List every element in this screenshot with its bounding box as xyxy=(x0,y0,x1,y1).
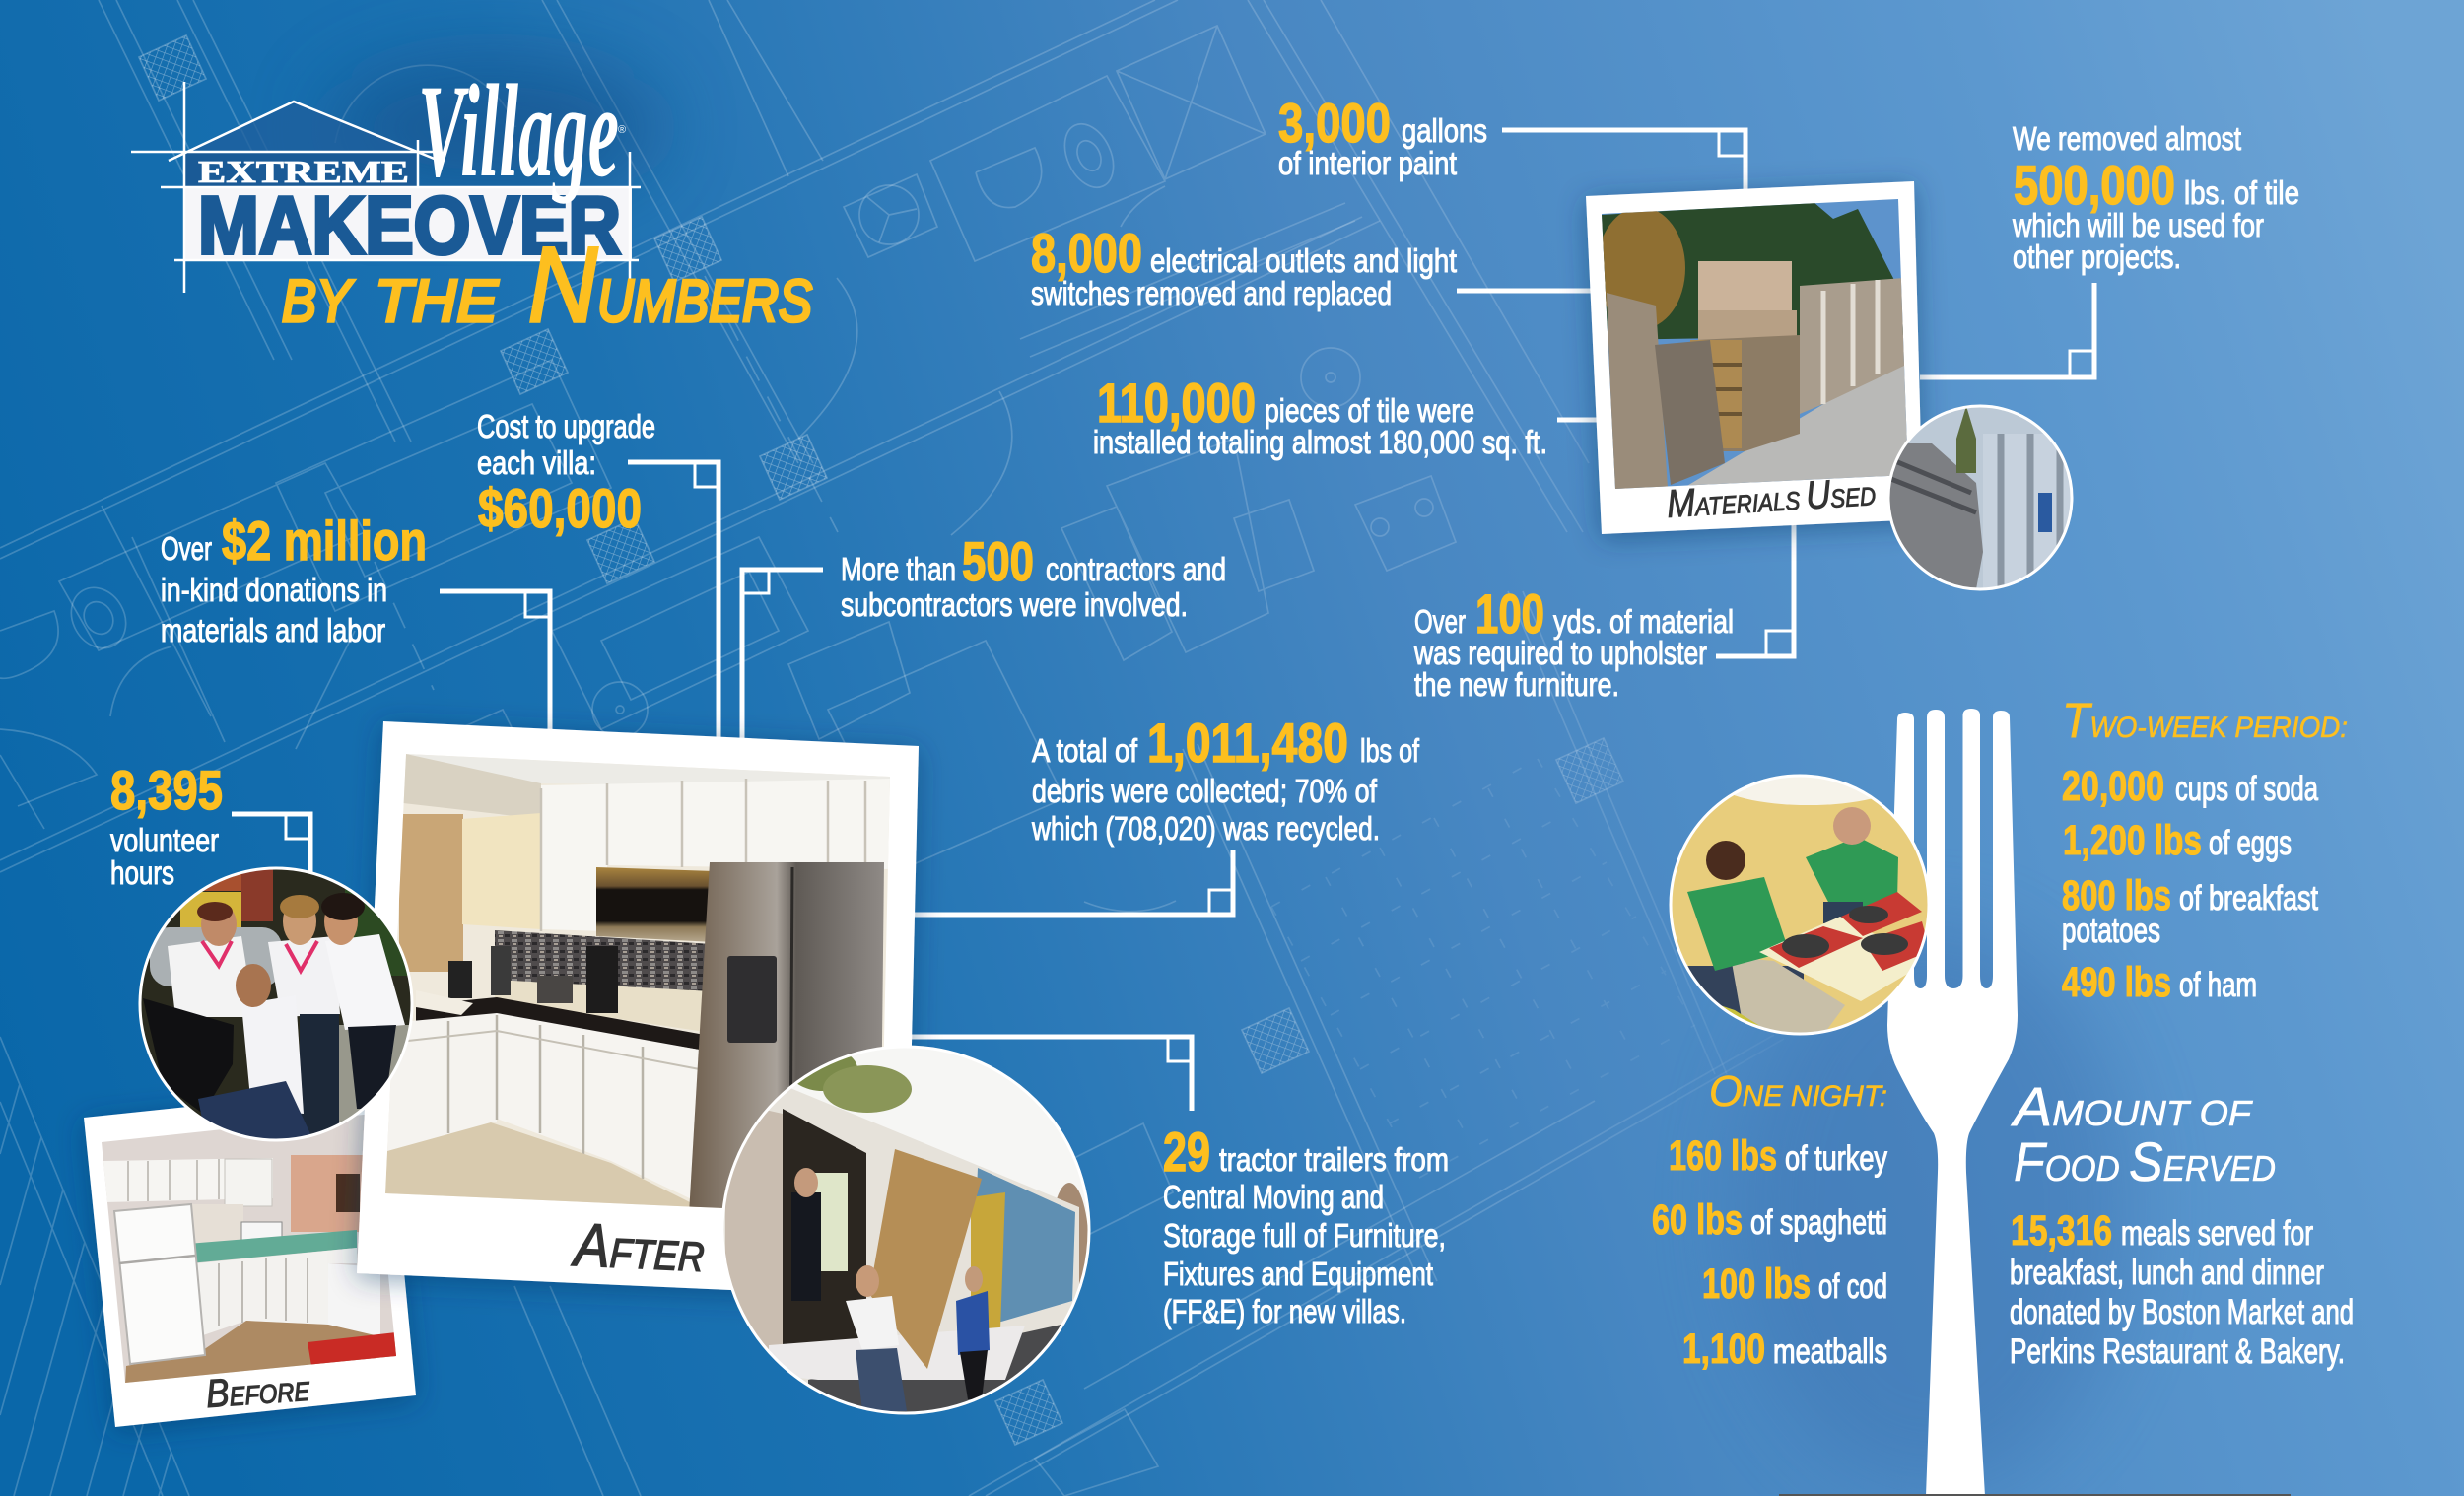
photo circle: volunteers xyxy=(138,867,414,1143)
text: tractor trailers: (FF&E) for new villas. xyxy=(1163,1293,1406,1329)
photo circle: paint buckets xyxy=(1888,406,2072,589)
text: paint xyxy=(1278,92,1487,181)
list: two-week food amounts: of ham xyxy=(2179,966,2257,1004)
text: cost to upgrade xyxy=(477,408,655,539)
icon: fork xyxy=(1887,709,2018,1496)
title: By the Numbers: UMBERS xyxy=(597,268,812,334)
logo: Extreme Makeover Village: MAKEOVER xyxy=(198,179,621,271)
photo circle: moving truck xyxy=(722,1047,1089,1413)
text: meals served: breakfast, lunch and dinner xyxy=(2010,1254,2324,1292)
polaroid: after photo xyxy=(357,721,919,1298)
text: cost to upgrade: Cost to upgrade xyxy=(477,408,655,444)
text: tractor trailers: Central Moving and xyxy=(1163,1179,1384,1215)
text: contractors: 500 xyxy=(962,530,1034,592)
text: tractor trailers: Storage full of Furniture, xyxy=(1163,1217,1446,1254)
title: By the Numbers xyxy=(282,225,812,344)
text: upholstery: 100 xyxy=(1475,582,1544,645)
list: two-week food amounts: of breakfast xyxy=(2179,879,2318,918)
text: upholstery: Over xyxy=(1414,603,1466,640)
text: debris: which (708,020) was recycled. xyxy=(1031,810,1380,847)
text: debris: 1,011,480 xyxy=(1147,712,1348,774)
list: one-night food amounts: of spaghetti xyxy=(1750,1203,1887,1242)
text: contractors xyxy=(841,530,1226,623)
text: volunteer hours: hours xyxy=(110,854,174,891)
text: meals served xyxy=(2010,1207,2354,1371)
text: paint: gallons xyxy=(1402,112,1487,149)
list: one-night food amounts: of cod xyxy=(1818,1267,1887,1306)
connector: debris xyxy=(911,850,1233,915)
text: tile pieces: pieces of tile were xyxy=(1265,392,1474,429)
heading: amount of food served xyxy=(2011,1075,2276,1192)
text: upholstery: was required to upholster xyxy=(1413,635,1707,671)
text: two million donations: in-kind donations in xyxy=(161,572,387,608)
polaroid: before photo: BEFORE xyxy=(205,1366,311,1416)
text: upholstery: the new furniture. xyxy=(1414,666,1619,703)
text: electrical outlets: 8,000 xyxy=(1031,222,1142,284)
text: tile pieces: installed totaling almost 180,000 sq. ft. xyxy=(1093,424,1547,460)
text: debris: A total of xyxy=(1032,732,1138,769)
connector: upholstery xyxy=(1716,522,1794,656)
heading: two-week period: TWO-WEEK PERIOD: xyxy=(2062,693,2348,748)
text: tractor trailers: tractor trailers from xyxy=(1219,1141,1449,1178)
text: contractors: subcontractors were involved. xyxy=(841,586,1188,623)
text: two million donations: Over xyxy=(161,530,212,567)
text: meals served: Perkins Restaurant & Bakery. xyxy=(2010,1332,2345,1371)
connector: two million donations xyxy=(440,591,550,739)
connector: tile removed xyxy=(1920,283,2094,377)
text: two million donations xyxy=(161,510,427,648)
heading: amount of food served: AMOUNT OF xyxy=(2011,1075,2253,1137)
connector: paint xyxy=(1502,130,1745,192)
list: two-week food amounts: 490 lbs xyxy=(2062,959,2171,1006)
connector: tile pieces xyxy=(1557,418,1597,422)
list: two-week food amounts: 20,000 xyxy=(2062,763,2164,810)
list: one-night food amounts: 100 lbs xyxy=(1702,1260,1811,1308)
text: volunteer hours: volunteer xyxy=(110,822,219,858)
text: two million donations: materials and labor xyxy=(161,612,385,648)
list: two-week food amounts: of eggs xyxy=(2209,824,2292,862)
title: By the Numbers: N xyxy=(528,225,598,344)
text: upholstery: yds. of material xyxy=(1553,603,1734,640)
polaroid: materials used photo xyxy=(1586,181,1923,534)
text: electrical outlets: switches removed and replaced xyxy=(1031,275,1392,311)
text: tile pieces xyxy=(1093,372,1547,460)
text: debris xyxy=(1031,712,1420,847)
soft dark glow behind fork xyxy=(1735,926,2129,1488)
text: tractor trailers: Fixtures and Equipment xyxy=(1163,1256,1433,1292)
photo circle: volunteers eating xyxy=(1670,762,1930,1035)
text: tile removed xyxy=(2012,120,2299,275)
title: By the Numbers: THE xyxy=(375,268,499,334)
list: one-night food amounts: 1,100 xyxy=(1682,1326,1765,1373)
polaroid: before photo xyxy=(84,1086,416,1427)
logo: Extreme Makeover Village: ® xyxy=(618,124,626,136)
list: two-week food amounts: 1,200 lbs xyxy=(2063,817,2202,864)
text: volunteer hours: 8,395 xyxy=(110,759,223,821)
text: electrical outlets xyxy=(1031,222,1457,311)
list: one-night food amounts: of turkey xyxy=(1785,1139,1887,1178)
list: one-night food amounts: meatballs xyxy=(1773,1332,1887,1371)
list: one-night food amounts: 60 lbs xyxy=(1652,1196,1743,1244)
text: electrical outlets: electrical outlets and light xyxy=(1150,242,1457,279)
bottom edge line xyxy=(1779,1494,2291,1496)
logo: Extreme Makeover Village xyxy=(131,58,660,293)
text: contractors: contractors and xyxy=(1046,551,1226,587)
text: cost to upgrade: each villa: xyxy=(477,444,596,481)
text: tile removed: which will be used for xyxy=(2012,207,2264,243)
list: two-week food amounts: cups of soda xyxy=(2175,770,2318,808)
text: cost to upgrade: $60,000 xyxy=(478,477,642,539)
heading: amount of food served: FOOD SERVED xyxy=(2014,1130,2276,1192)
logo: Extreme Makeover Village: Village xyxy=(418,58,619,205)
connector: volunteer hours xyxy=(232,814,310,877)
text: paint: of interior paint xyxy=(1278,145,1457,181)
text: paint: 3,000 xyxy=(1278,92,1391,154)
text: meals served: meals served for xyxy=(2121,1214,2313,1253)
list: two-week food amounts xyxy=(2062,763,2318,1006)
heading: one night: ONE NIGHT: xyxy=(1709,1067,1887,1116)
connector: cost to upgrade xyxy=(628,462,719,749)
list: one-night food amounts: 160 lbs xyxy=(1669,1132,1777,1180)
logo: Extreme Makeover Village: EXTREME xyxy=(198,154,409,189)
polaroid: after photo: AFTER xyxy=(570,1211,706,1285)
text: tractor trailers xyxy=(1163,1121,1449,1329)
text: tile pieces: 110,000 xyxy=(1097,372,1256,434)
text: tile removed: other projects. xyxy=(2013,238,2181,275)
connector: tractor trailers xyxy=(902,1037,1192,1111)
text: tile removed: We removed almost xyxy=(2013,120,2241,157)
text: tile removed: 500,000 xyxy=(2014,154,2175,216)
text: meals served: 15,316 xyxy=(2011,1207,2112,1255)
text: tractor trailers: 29 xyxy=(1163,1121,1210,1183)
connector: contractors xyxy=(742,570,823,749)
text: tile removed: lbs. of tile xyxy=(2184,174,2299,211)
text: volunteer hours xyxy=(110,759,223,891)
list: one-night food amounts xyxy=(1652,1132,1887,1373)
text: debris: debris were collected; 70% of xyxy=(1032,773,1378,809)
text: contractors: More than xyxy=(841,551,956,587)
polaroid: materials used photo: MATERIALS USED xyxy=(1666,470,1877,526)
list: two-week food amounts: 800 lbs xyxy=(2062,872,2171,919)
list: two-week food amounts: potatoes xyxy=(2062,912,2160,950)
text: upholstery xyxy=(1413,582,1734,703)
title: By the Numbers: BY xyxy=(282,268,354,334)
text: two million donations: $2 million xyxy=(222,510,427,572)
text: debris: lbs of xyxy=(1360,732,1420,769)
connector: electrical outlets xyxy=(1457,288,1592,294)
blueprint floor plan background xyxy=(0,0,1784,1496)
